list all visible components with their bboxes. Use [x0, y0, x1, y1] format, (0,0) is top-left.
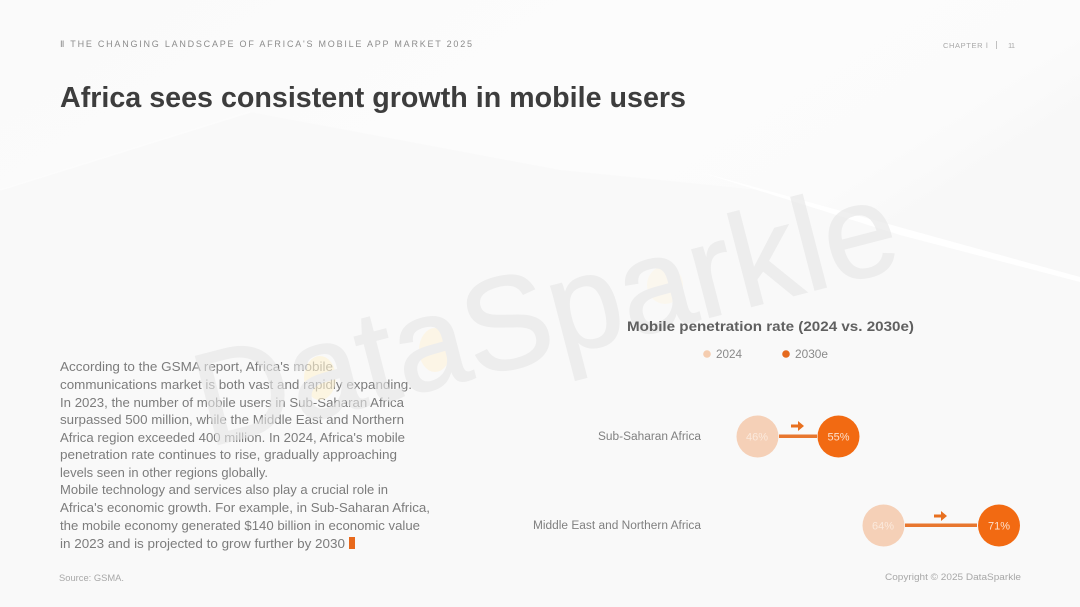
- row: Middle East and Northern Africa: 64%: [872, 520, 894, 532]
- body text: In 2023, the number of mobile users in Sub-Saharan Africa: [60, 396, 404, 410]
- header: chapter and page number: CHAPTER Ⅰ: [943, 41, 988, 50]
- header: chapter and page number: 11: [1008, 41, 1015, 50]
- body text: communications market is both vast and rapidly expanding.: [60, 378, 412, 392]
- row: Sub-Saharan Africa: 55%: [827, 432, 850, 444]
- legend: 2024: [716, 349, 743, 361]
- row: Sub-Saharan Africa: [598, 416, 860, 458]
- copyright: Copyright © 2025 DataSparkle: [885, 572, 1021, 582]
- chart title: Mobile penetration rate (2024 vs. 2030e): [627, 318, 914, 334]
- title: Africa sees consistent growth in mobile users: [60, 82, 686, 114]
- body text: According to the GSMA report, Africa's mobile: [60, 360, 333, 374]
- header: report name: Ⅱ THE CHANGING LANDSCAPE OF AFRICA'S MOBILE APP MARKET 2025: [60, 39, 472, 49]
- body text: Africa's economic growth. For example, in Sub-Saharan Africa,: [60, 501, 430, 515]
- legend: [703, 349, 828, 361]
- row: Sub-Saharan Africa: 46%: [746, 432, 768, 444]
- row: Middle East and Northern Africa: 71%: [988, 520, 1010, 532]
- row: Middle East and Northern Africa: Middle East and Northern Africa: [533, 520, 702, 532]
- row: Middle East and Northern Africa: [533, 504, 1020, 546]
- row: Sub-Saharan Africa: Sub-Saharan Africa: [598, 431, 702, 443]
- body text: the mobile economy generated $140 billion in economic value: [60, 519, 420, 533]
- body text: Mobile technology and services also play a crucial role in: [60, 483, 388, 497]
- chart: mobile penetration rate: [533, 318, 1020, 546]
- header: chapter and page number: [943, 41, 1015, 50]
- source note: Source: GSMA.: [59, 573, 124, 583]
- body text: levels seen in other regions globally.: [60, 466, 268, 480]
- legend: 2030e: [795, 349, 828, 361]
- body text: Africa region exceeded 400 million. In 2024, Africa's mobile: [60, 431, 405, 445]
- body text: penetration rate continues to rise, gradually approaching: [60, 448, 397, 462]
- body text: [60, 360, 430, 551]
- body text: in 2023 and is projected to grow further by 2030: [60, 537, 345, 551]
- watermark: DataSparkle: [178, 152, 912, 474]
- body text: surpassed 500 million, while the Middle East and Northern: [60, 413, 404, 427]
